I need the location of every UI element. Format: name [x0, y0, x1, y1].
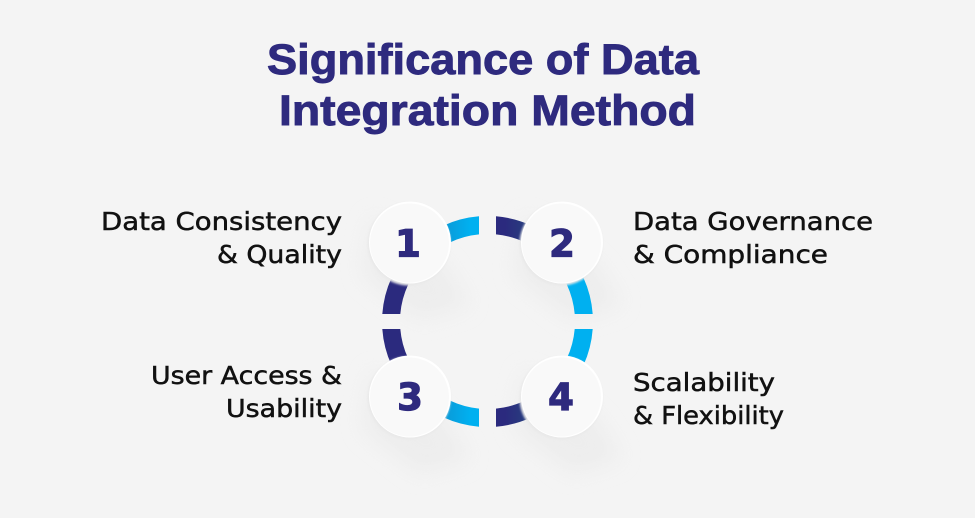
badge 3: 3: [397, 376, 423, 419]
label: data consistency and quality: Data Consistency: [101, 207, 342, 236]
segmented ring: [382, 216, 593, 427]
label: user access and usability: Usability: [226, 394, 342, 423]
label: scalability and flexibility: & Flexibility: [633, 401, 784, 430]
label: data consistency and quality: & Quality: [217, 240, 342, 269]
badge 2: [520, 202, 603, 286]
badge 2: 2: [549, 222, 575, 266]
badge 3: [368, 356, 451, 440]
title: [267, 36, 700, 135]
badge 1: [368, 202, 451, 286]
badge shadows: [362, 215, 622, 474]
badge 4: [520, 356, 603, 440]
label: user access and usability: User Access &: [151, 361, 342, 390]
label: data governance and compliance: [633, 207, 873, 269]
label: data consistency and quality: [101, 207, 342, 269]
label: scalability and flexibility: Scalability: [633, 368, 775, 397]
label: data governance and compliance: & Compliance: [633, 240, 828, 269]
title: Significance of Data: [267, 36, 700, 84]
label: scalability and flexibility: [633, 368, 784, 430]
label: user access and usability: [151, 361, 342, 423]
badge 4: 4: [548, 376, 574, 419]
badge 1: 1: [395, 222, 421, 266]
title: Integration Method: [279, 87, 696, 135]
label: data governance and compliance: Data Governance: [633, 207, 873, 236]
